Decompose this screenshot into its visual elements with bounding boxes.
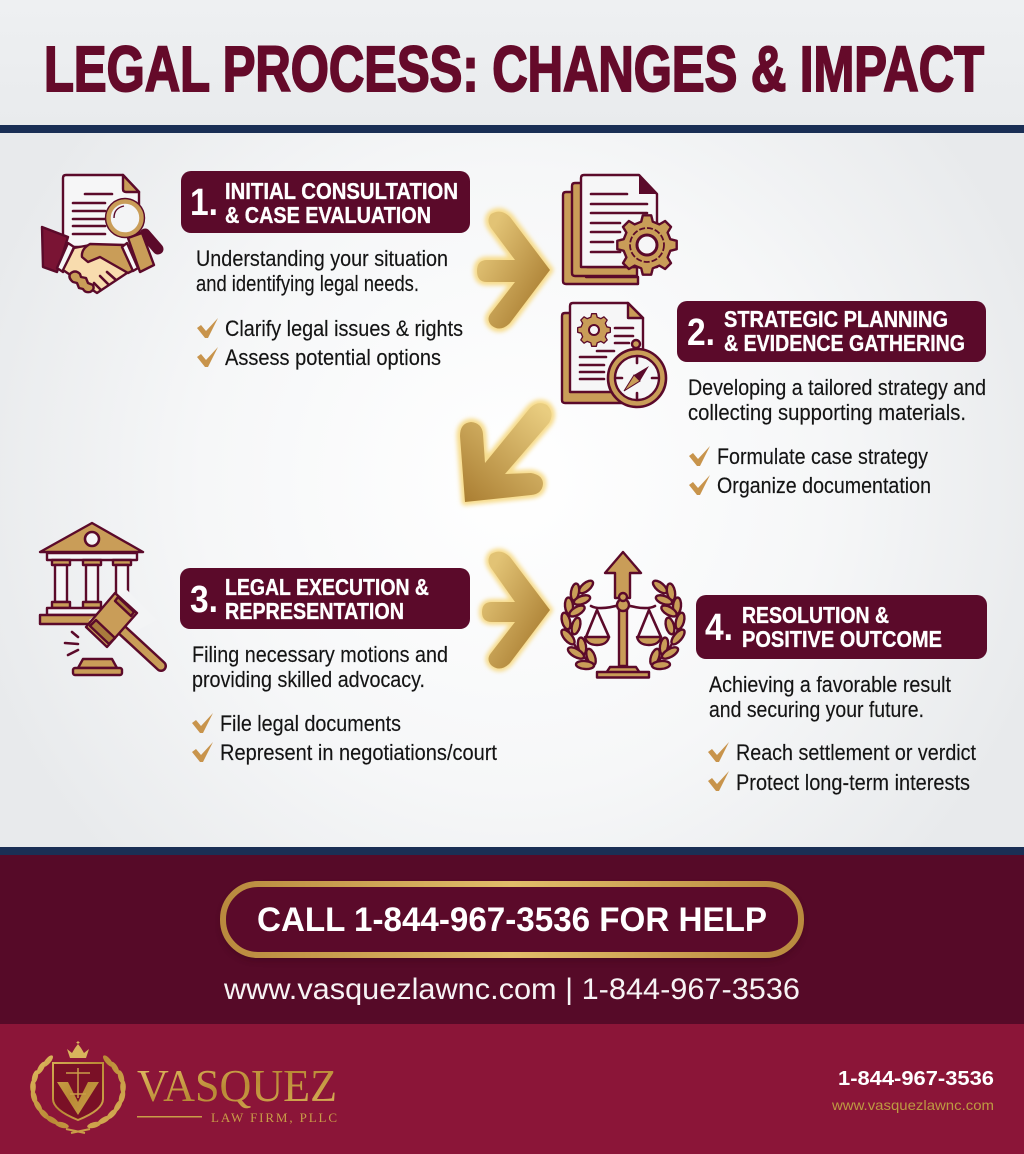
step 1 description: Understanding your situation [196,246,448,271]
logo wordmark: LAW FIRM, PLLC [211,1110,337,1125]
step 1 checklist: Assess potential options [225,345,441,370]
step 2 description: Developing a tailored strategy and [688,375,986,400]
logo: Vasquez Law Firm [29,1041,337,1133]
logo emblem [29,1041,127,1133]
step 4 badge [696,595,987,659]
step 4 badge: 4. [705,607,733,649]
step 3 checklist: Represent in negotiations/court [220,740,497,765]
step 4 checklist: Protect long-term interests [736,770,970,795]
step 2 checklist: Formulate case strategy [717,444,928,469]
step 4 checklist: Reach settlement or verdict [736,740,976,765]
step 3 checklist [192,711,497,765]
icon: document, magnifier and handshake [42,175,158,293]
step 3 badge: REPRESENTATION [225,598,404,624]
left laurel [559,578,598,670]
step 1 checklist: Clarify legal issues & rights [225,316,463,341]
step 2 checklist [689,444,931,498]
step 2 description [688,375,986,425]
step 1 description: and identifying legal needs. [196,271,419,296]
header band [0,0,1024,133]
step 3 badge [180,568,470,629]
step 2 badge: 2. [687,312,715,354]
step 4 checklist [708,740,976,795]
right laurel [648,578,687,670]
call button [223,884,801,959]
footer band [0,1024,1024,1154]
step 3 description: providing skilled advocacy. [192,667,425,692]
footer phone: 1-844-967-3536 [838,1068,994,1090]
step 4 badge: POSITIVE OUTCOME [742,626,942,652]
panel: step 1 [42,171,470,370]
step 3 checklist: File legal documents [220,711,401,736]
step 1 checklist [197,316,463,370]
step 4 description [709,672,951,722]
icon: courthouse and gavel [40,523,161,675]
panel: step 4 [559,552,987,795]
step 3 badge: 3. [190,579,218,621]
call button: CALL 1-844-967-3536 FOR HELP [257,901,767,939]
step 3 description [192,642,448,692]
step 1 badge: INITIAL CONSULTATION [225,178,458,204]
step 3 description: Filing necessary motions and [192,642,448,667]
website and phone line: www.vasquezlawnc.com | 1-844-967-3536 [223,973,800,1006]
arrow: step 3 to step 4 [482,552,550,669]
step 4 badge: RESOLUTION & [742,602,889,628]
logo wordmark: VASQUEZ [137,1061,337,1111]
step 2 description: collecting supporting materials. [688,400,966,425]
arrow: step 2 to step 3 [460,403,552,502]
panel: step 3 [40,523,497,765]
step 1 badge: 1. [190,182,218,224]
step 2 checklist: Organize documentation [717,473,931,498]
step 4 description: Achieving a favorable result [709,672,951,697]
arrow: step 1 to step 2 [477,212,550,329]
panel: step 2 [562,175,986,498]
icon: strategy document and compass [562,303,666,407]
step 1 badge: & CASE EVALUATION [225,202,431,228]
step 1 badge [181,171,470,233]
step 2 badge [677,301,986,362]
footer website: www.vasquezlawnc.com [831,1097,994,1113]
step 2 badge: & EVIDENCE GATHERING [724,330,965,356]
call to action band [0,847,1024,1024]
step 4 description: and securing your future. [709,697,924,722]
step 1 description [196,246,448,296]
step 2 badge: STRATEGIC PLANNING [724,306,948,332]
icon: scales, laurel and rising arrow [559,552,687,678]
step 3 badge: LEGAL EXECUTION & [225,574,429,600]
icon: documents and gear [563,175,677,284]
